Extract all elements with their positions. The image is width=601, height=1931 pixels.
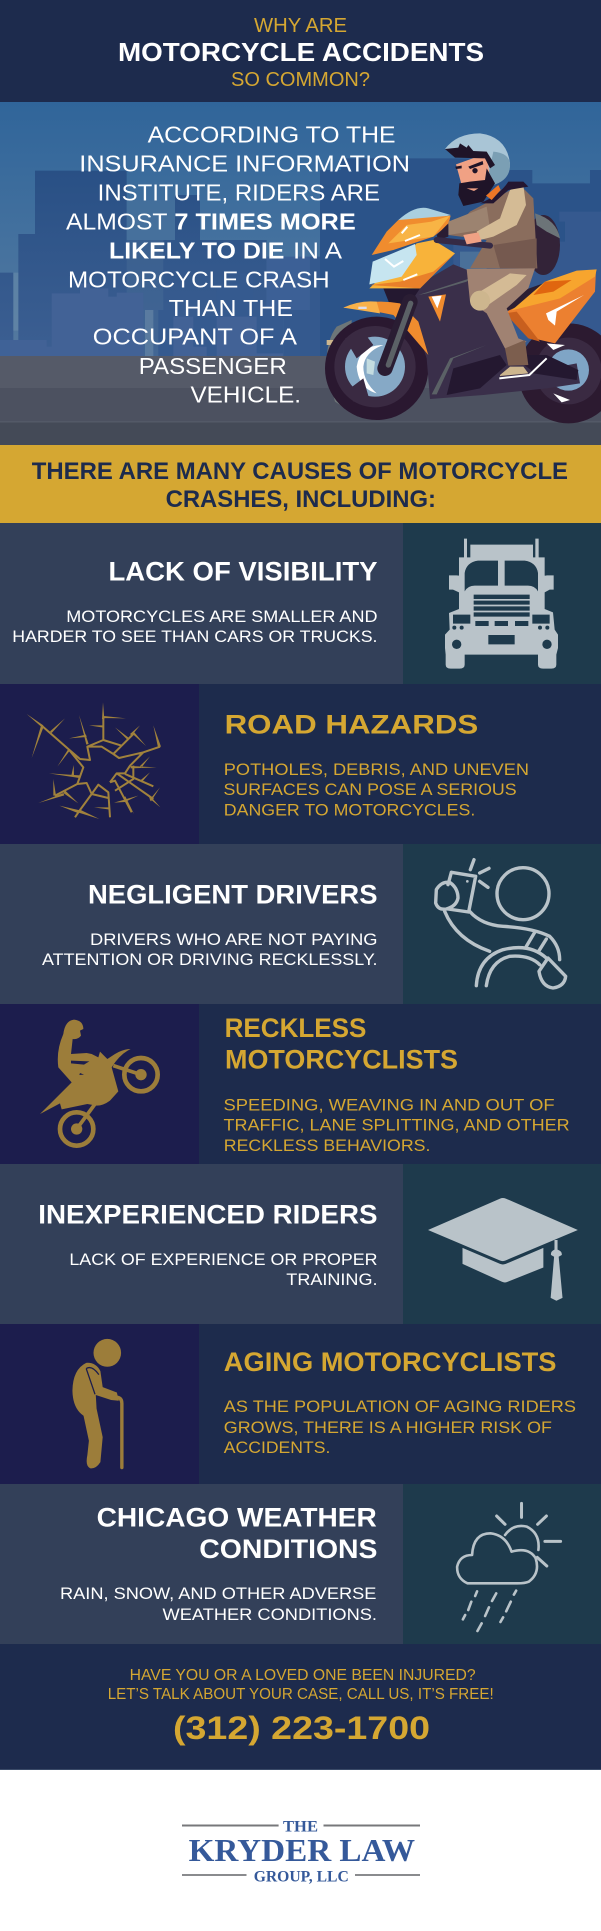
statistic text: OCCUPANT OF A <box>93 324 297 350</box>
heading line: motorcycle accidents: MOTORCYCLE ACCIDENTS <box>118 37 484 67</box>
statistic text: INSURANCE INFORMATION <box>79 151 410 177</box>
statistic text: ACCORDING TO THE <box>148 122 396 148</box>
description <box>12 607 378 646</box>
statistic text: THAN THE <box>169 295 293 321</box>
description <box>69 1250 378 1289</box>
statistic text: VEHICLE. <box>190 382 301 408</box>
heading: RECKLESS <box>225 1013 366 1043</box>
call to action <box>0 1644 601 1770</box>
statistic text: 7 TIMES MORE <box>174 209 356 235</box>
section heading band <box>0 445 601 523</box>
description: SURFACES CAN POSE A SERIOUS <box>224 780 517 799</box>
statistic text: INSTITUTE, RIDERS ARE <box>98 180 380 206</box>
section heading band: CRASHES, INCLUDING: <box>166 486 436 513</box>
icon: truck front <box>445 539 558 669</box>
description <box>224 1095 570 1155</box>
description: SPEEDING, WEAVING IN AND OUT OF <box>224 1095 555 1114</box>
road <box>0 356 601 445</box>
description: HARDER TO SEE THAN CARS OR TRUCKS. <box>12 627 378 646</box>
heading <box>225 1013 458 1075</box>
description: DANGER TO MOTORCYCLES. <box>224 801 475 820</box>
heading line: why are: WHY ARE <box>254 15 347 37</box>
prompt text: HAVE YOU OR A LOVED ONE BEEN INJURED? <box>130 1667 476 1684</box>
description: ATTENTION OR DRIVING RECKLESSLY. <box>42 950 378 969</box>
statistic text: IN A <box>293 238 342 264</box>
heading: CONDITIONS <box>199 1534 378 1564</box>
panel: road hazards <box>0 684 601 844</box>
footer: logo: THE <box>283 1819 318 1836</box>
description <box>224 760 529 820</box>
city skyline <box>0 171 340 356</box>
icon: graduation cap <box>428 1198 578 1301</box>
panel: reckless motorcyclists <box>0 1004 601 1164</box>
heading: INEXPERIENCED RIDERS <box>38 1200 378 1230</box>
description: LACK OF EXPERIENCE OR PROPER <box>69 1250 378 1269</box>
footer: logo: GROUP, LLC <box>254 1869 349 1886</box>
description <box>60 1584 377 1624</box>
heading: ROAD HAZARDS <box>225 710 478 740</box>
description: WEATHER CONDITIONS. <box>162 1605 377 1624</box>
panel: hero with statistic and motorcycle illustration <box>0 102 601 445</box>
statistic text: MOTORCYCLE CRASH <box>68 266 330 292</box>
footer: logo: KRYDER LAW <box>189 1832 415 1868</box>
panel: aging motorcyclists <box>0 1324 601 1484</box>
icon: rider taking selfie <box>436 860 566 988</box>
phone number: (312) 223-1700 <box>173 1710 430 1746</box>
heading: AGING MOTORCYCLISTS <box>224 1347 557 1377</box>
panel: lack of visibility <box>0 523 601 684</box>
description: RECKLESS BEHAVIORS. <box>224 1136 430 1155</box>
city skyline right <box>320 158 601 356</box>
panel: inexperienced riders <box>0 1164 601 1324</box>
description: ACCIDENTS. <box>224 1438 330 1457</box>
description: GROWS, THERE IS A HIGHER RISK OF <box>224 1418 552 1437</box>
heading: LACK OF VISIBILITY <box>108 557 378 587</box>
section heading band: THERE ARE MANY CAUSES OF MOTORCYCLE <box>32 458 568 485</box>
description: RAIN, SNOW, AND OTHER ADVERSE <box>60 1584 376 1603</box>
icon: wheelie silhouette <box>40 1020 158 1146</box>
prompt text <box>108 1667 494 1703</box>
heading <box>97 1503 377 1564</box>
footer: logo <box>0 1770 601 1931</box>
panel: chicago weather conditions <box>0 1484 601 1644</box>
panel: negligent drivers <box>0 844 601 1004</box>
description: MOTORCYCLES ARE SMALLER AND <box>66 607 378 626</box>
icon: cracked glass <box>27 702 161 819</box>
heading: NEGLIGENT DRIVERS <box>88 880 377 910</box>
header: title <box>0 0 601 102</box>
description: TRAINING. <box>286 1270 378 1289</box>
description: POTHOLES, DEBRIS, AND UNEVEN <box>224 760 529 779</box>
description: TRAFFIC, LANE SPLITTING, AND OTHER <box>224 1115 570 1134</box>
icon: cloud with sun and rain <box>457 1503 561 1631</box>
description <box>224 1397 576 1457</box>
description: AS THE POPULATION OF AGING RIDERS <box>224 1397 576 1416</box>
heading line: so common: SO COMMON? <box>231 69 370 91</box>
icon: elderly person with cane <box>72 1339 122 1468</box>
prompt text: LET’S TALK ABOUT YOUR CASE, CALL US, IT’S FREE! <box>108 1686 494 1703</box>
heading: MOTORCYCLISTS <box>225 1045 458 1075</box>
description <box>42 930 378 969</box>
statistic text: PASSENGER <box>139 353 287 379</box>
illustration: rider on orange motorcycle <box>325 133 601 423</box>
description: DRIVERS WHO ARE NOT PAYING <box>90 930 378 949</box>
statistic text: ALMOST <box>66 209 168 235</box>
statistic text: LIKELY TO DIE <box>109 238 284 264</box>
statistic text <box>66 122 410 408</box>
heading: CHICAGO WEATHER <box>97 1503 377 1533</box>
